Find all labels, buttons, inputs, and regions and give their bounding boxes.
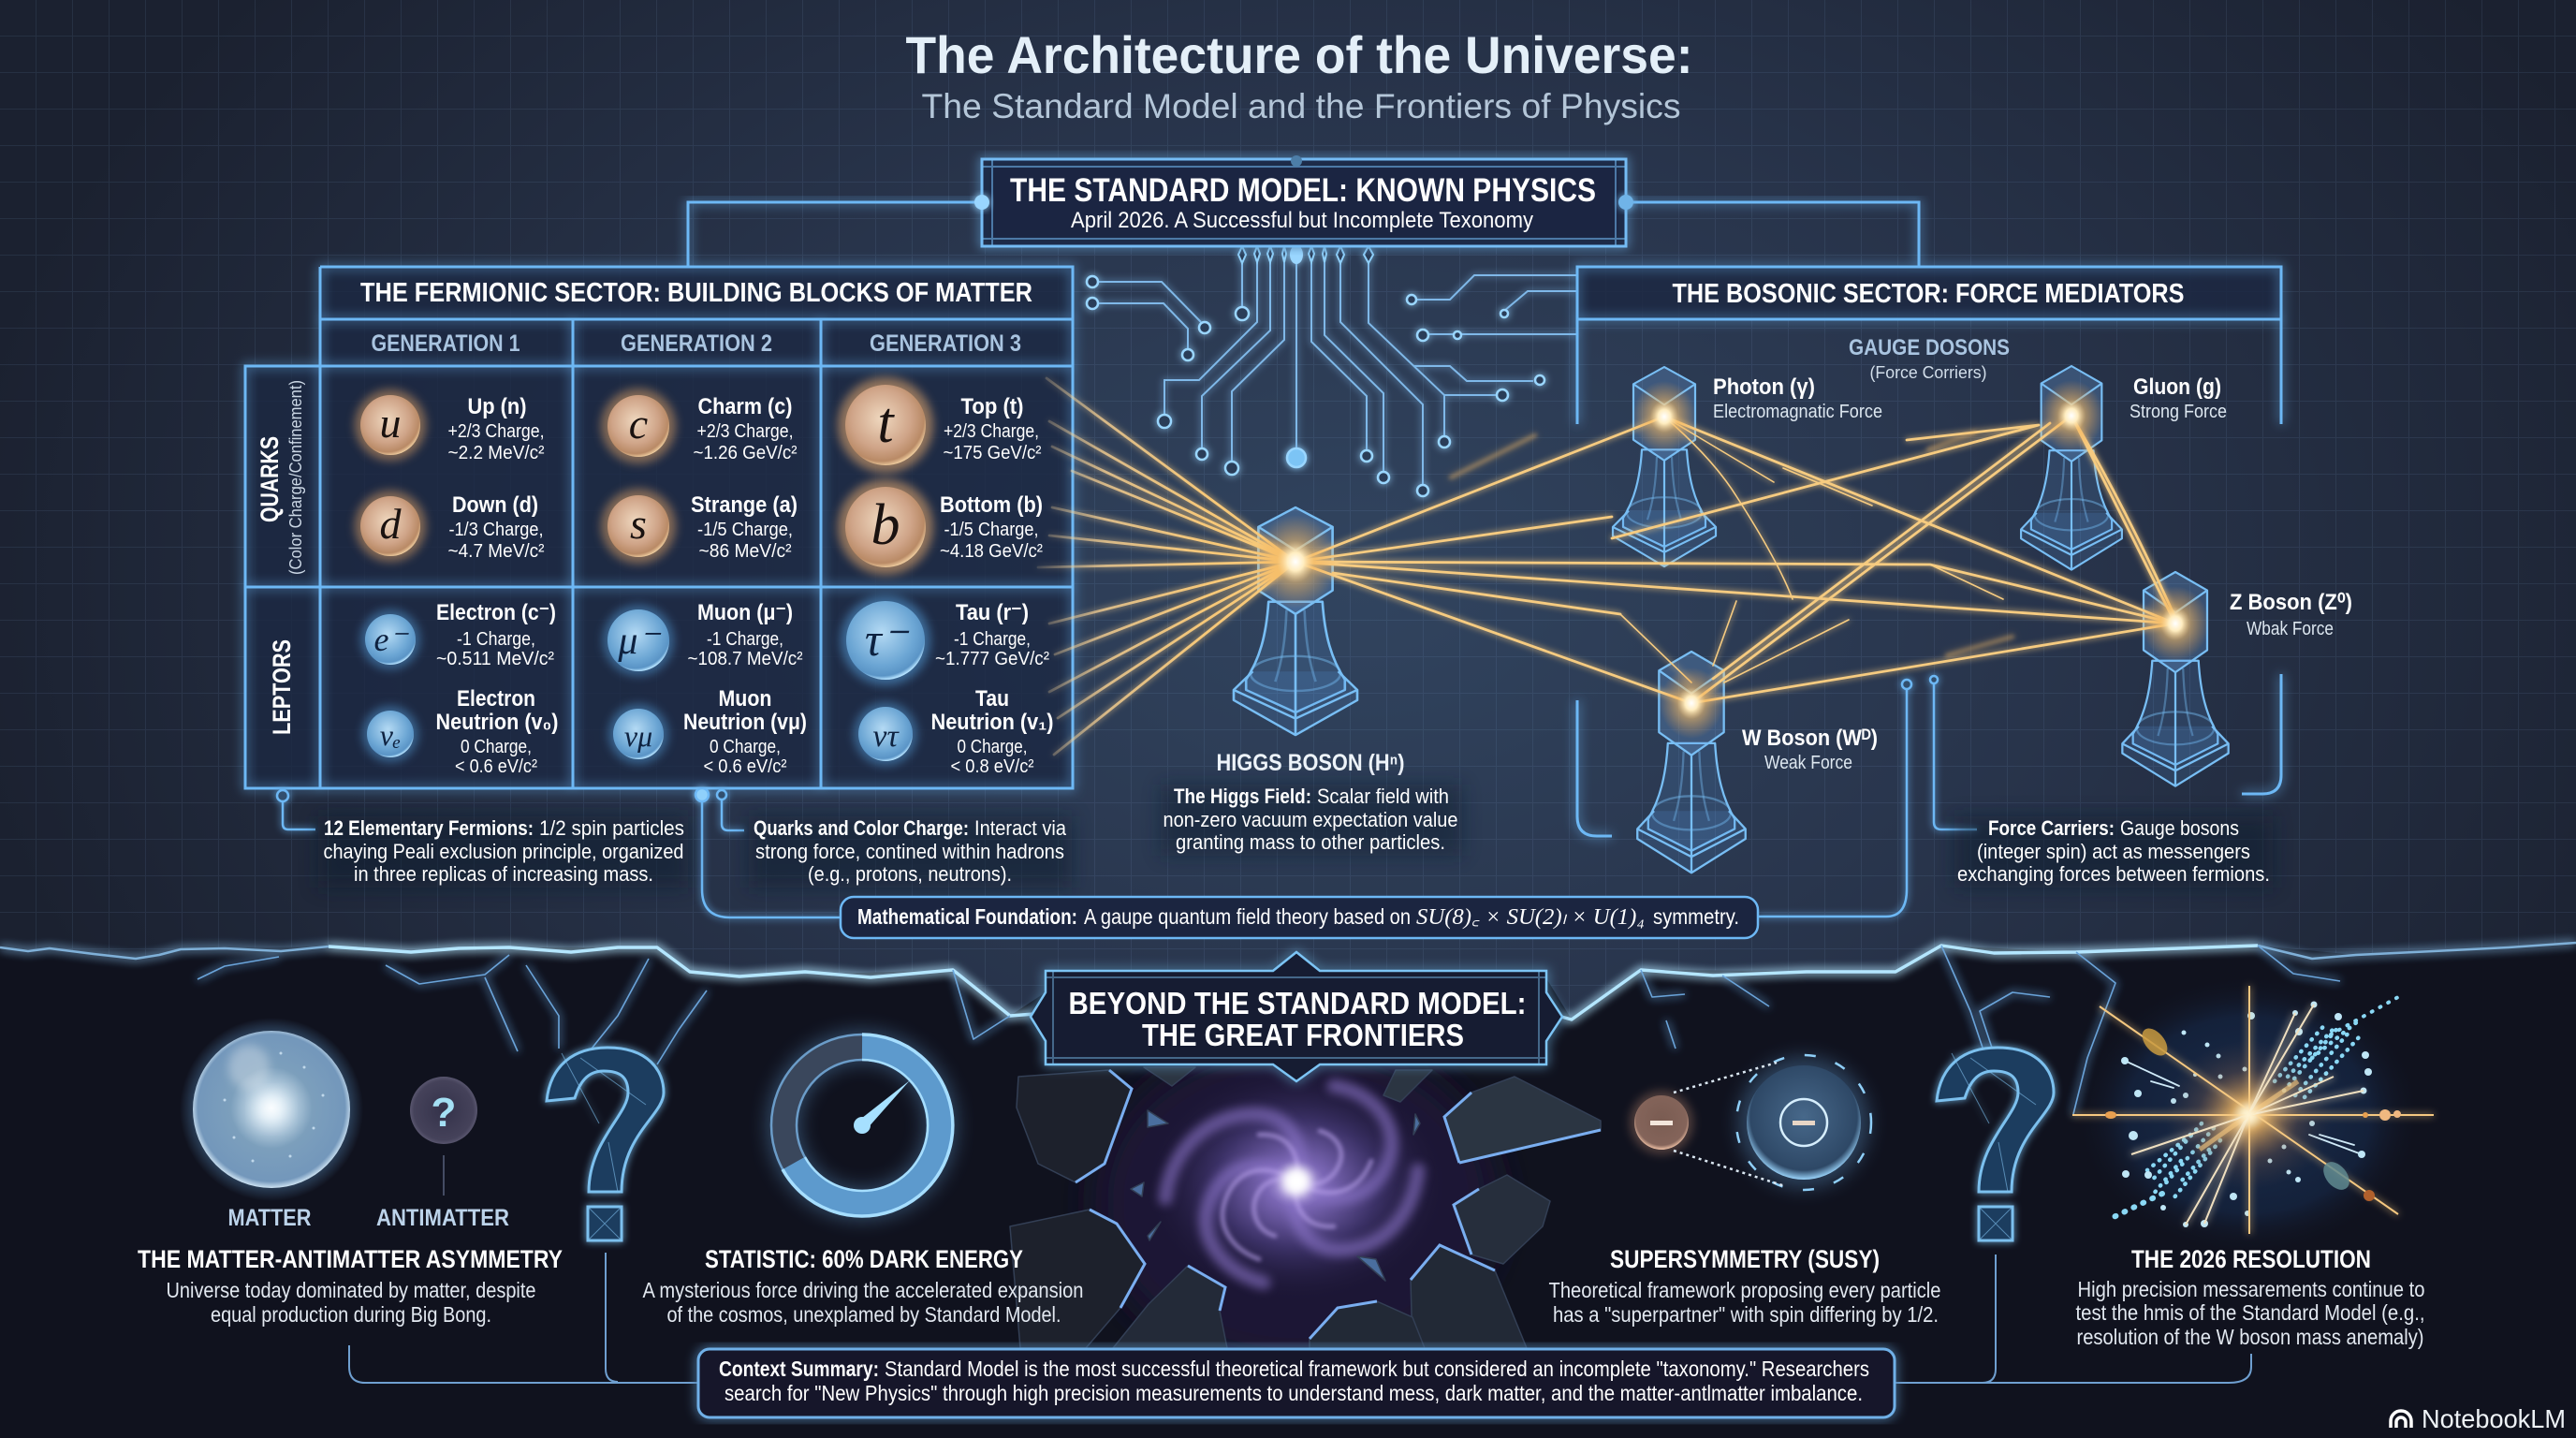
particle: top quark: ~175 GeV/c²: [944, 443, 1042, 463]
particle: up quark: [355, 389, 545, 463]
particle: strange quark: ~86 MeV/c²: [698, 541, 792, 562]
summary connectors: [349, 1253, 2251, 1383]
particle: muon neutrino: Neutrion (vμ): [683, 710, 807, 735]
callout connectors: [277, 676, 1977, 917]
particle: tau: τ⁻: [865, 613, 910, 666]
particle: bottom quark: -1/5 Charge,: [944, 520, 1039, 540]
particle: tau: [841, 595, 1049, 685]
particle: top quark: +2/3 Charge,: [944, 421, 1039, 442]
callout: 12 elementary fermions: 1/2 spin particles: [539, 816, 684, 840]
particle: strange quark: Strange (a): [691, 492, 798, 518]
particle: tau neutrino: ντ: [872, 719, 900, 754]
higgs field beams: [1038, 378, 2175, 755]
particle: muon neutrino: [608, 686, 807, 777]
callout: 12 elementary fermions: [318, 816, 688, 888]
generation labels: [371, 330, 1021, 357]
text: supersymmetry: SUPERSYMMETRY (SUSY): [1610, 1245, 1880, 1273]
callout: quarks and color charge: Quarks and Color Charge:: [754, 816, 969, 840]
particle: up quark: Up (n): [468, 394, 526, 419]
label: quarks: QUARKS: [256, 436, 284, 522]
particle: bottom quark: [838, 479, 1043, 575]
text: matter antimatter asymmetry: THE MATTER-ANTIMATTER ASYMMETRY: [138, 1245, 563, 1273]
text: dark energy statistic: [642, 1245, 1084, 1327]
icon: left question mark: [547, 1048, 664, 1240]
heading: standard model: THE STANDARD MODEL: KNOWN PHYSICS: [1010, 172, 1596, 209]
particle: tau: ~1.777 GeV/c²: [935, 649, 1049, 669]
particle: electron: Electron (c⁻): [436, 600, 556, 625]
particle: up quark: ~2.2 MeV/c²: [447, 443, 545, 463]
circuit traces: [1087, 245, 1577, 496]
heading: beyond: [1069, 986, 1526, 1052]
particle: muon: [603, 600, 803, 676]
callout: quarks and color charge: strong force, contined within hadrons: [755, 840, 1064, 863]
title: [906, 25, 1692, 125]
callout: force carriers: [1954, 816, 2273, 888]
scattered dots: [2121, 1002, 2372, 1227]
icon: collision burst: [2072, 975, 2434, 1255]
label: higgs boson: [1161, 750, 1462, 856]
particle: muon neutrino: 0 Charge,: [710, 737, 781, 757]
particle: strange quark: [601, 489, 798, 564]
icon: dark energy gauge: [771, 1034, 953, 1216]
panel: beyond the standard model banner: [1031, 952, 1562, 1081]
particle: charm quark: +2/3 Charge,: [696, 421, 794, 442]
callout: 12 elementary fermions: in three replicas of increasing mass.: [354, 862, 653, 886]
particle: up quark: u: [380, 399, 401, 447]
label: quarks: [256, 380, 305, 575]
text: higgs field: [1161, 785, 1462, 856]
label: z boson: Z Boson (Z⁰): [2230, 590, 2352, 615]
label: gluon: Gluon (g): [2133, 374, 2221, 400]
text: matter antimatter asymmetry: equal production during Big Bong.: [211, 1302, 491, 1327]
generation labels: GENERATION 1: [371, 330, 520, 357]
text: 2026 resolution: THE 2026 RESOLUTION: [2131, 1245, 2371, 1273]
label: matter and antimatter: MATTER: [228, 1205, 311, 1231]
particle: down quark: [355, 491, 545, 562]
icon: boson pillars: [1234, 366, 2229, 873]
particle: bottom quark: ~4.18 GeV/c²: [940, 541, 1043, 562]
callout: quarks and color charge: Interact via: [974, 816, 1067, 840]
text: higgs field: Scalar field with: [1317, 785, 1449, 808]
particle: tau neutrino: [854, 686, 1054, 777]
icon: right question mark: [1937, 1048, 2054, 1240]
particle: electron: [360, 600, 556, 669]
callout: context summary: Context Summary:: [719, 1357, 879, 1381]
particle: down quark: d: [380, 500, 402, 548]
particle: tau neutrino: < 0.8 eV/c²: [951, 756, 1034, 777]
gauge bosons label: [1849, 335, 2010, 382]
particle: tau: Tau (r⁻): [956, 600, 1029, 625]
text: dark energy statistic: of the cosmos, unexplamed by Standard Model.: [666, 1302, 1061, 1327]
particle: charm quark: ~1.26 GeV/c²: [693, 443, 798, 463]
callout: quarks and color charge: [749, 816, 1072, 888]
callout: mathematical foundation: symmetry.: [1653, 904, 1739, 929]
particle: tau: -1 Charge,: [954, 629, 1031, 650]
callout: force carriers: exchanging forces between fermions.: [1957, 862, 2270, 886]
callout: force carriers: Gauge bosons: [2120, 816, 2239, 840]
label: gluon: [2130, 374, 2227, 422]
panel: the standard model known physics: [974, 155, 1633, 246]
particle: electron neutrino: Electron: [457, 686, 535, 712]
particle: electron: e⁻: [374, 621, 409, 658]
label: photon: Electromagnatic Force: [1713, 402, 1882, 422]
text: 2026 resolution: [2076, 1245, 2424, 1349]
text: supersymmetry: [1548, 1245, 1941, 1327]
text: matter antimatter asymmetry: Universe today dominated by matter, despite: [167, 1278, 535, 1302]
callout: quarks and color charge: (e.g., protons, neutrons).: [808, 862, 1012, 886]
particle: tau neutrino: Neutrion (v₁): [930, 710, 1054, 735]
panel: fermionic sector table: [245, 267, 1073, 788]
particle: strange quark: s: [630, 500, 647, 548]
particle: top quark: [838, 377, 1042, 473]
particle: charm quark: c: [629, 400, 648, 448]
text: 2026 resolution: High precision messarements continue to: [2078, 1277, 2424, 1301]
text: higgs field: non-zero vacuum expectation value: [1163, 808, 1458, 831]
icon: supersymmetry particles: [1630, 1055, 1871, 1190]
label: photon: Photon (γ): [1713, 374, 1815, 400]
label: z boson: [2230, 590, 2352, 639]
particle: muon neutrino: < 0.6 eV/c²: [704, 756, 787, 777]
title: The Architecture of the Universe:: [906, 25, 1692, 84]
icon: antimatter: ?: [432, 1090, 456, 1136]
callout: 12 elementary fermions: 12 Elementary Fermions:: [324, 816, 534, 840]
subtitle: The Standard Model and the Frontiers of Physics: [921, 87, 1681, 125]
particle: muon: μ⁻: [617, 620, 661, 663]
callout: force carriers: (integer spin) act as messengers: [1977, 840, 2250, 863]
subheading: April 2026. A Successful but Incomplete Texonomy: [1071, 208, 1533, 233]
text: supersymmetry: has a "superpartner" with spin differing by 1/2.: [1553, 1302, 1939, 1327]
label: leptons: LEPTORS: [268, 639, 296, 735]
label: quarks: (Color Charge/Confinement): [286, 380, 305, 575]
text: 2026 resolution: resolution of the W boson mass anemaly): [2076, 1325, 2424, 1349]
logo: notebooklm: NotebookLM: [2422, 1404, 2566, 1433]
callout: mathematical foundation: [841, 897, 1758, 938]
label: photon: [1713, 374, 1882, 422]
particle: muon neutrino: Muon: [719, 686, 771, 712]
label: z boson: Wbak Force: [2247, 619, 2334, 639]
particle: electron neutrino: 0 Charge,: [461, 737, 532, 757]
label: w boson: W Boson (Wᴰ): [1742, 726, 1878, 751]
gauge bosons label: (Force Corriers): [1870, 363, 1986, 382]
heading: beyond: BEYOND THE STANDARD MODEL:: [1069, 986, 1526, 1020]
particle: electron neutrino: [362, 686, 558, 777]
text: higgs field: granting mass to other particles.: [1176, 830, 1445, 854]
particle: electron neutrino: Neutrion (v₀): [436, 710, 558, 735]
particle: charm quark: Charm (c): [698, 394, 792, 419]
particle: down quark: Down (d): [452, 492, 538, 518]
text: dark energy statistic: STATISTIC: 60% DARK ENERGY: [705, 1245, 1023, 1273]
particle: muon: Muon (μ⁻): [697, 600, 793, 625]
particle: electron neutrino: νₑ: [380, 718, 401, 752]
label: w boson: Weak Force: [1764, 753, 1852, 773]
particle: bottom quark: b: [871, 493, 900, 557]
callout: force carriers: Force Carriers:: [1988, 816, 2115, 840]
particle: tau neutrino: Tau: [975, 686, 1009, 712]
label: higgs boson: HIGGS BOSON (Hⁿ): [1217, 750, 1404, 776]
text: dark energy statistic: A mysterious force driving the accelerated expansion: [642, 1278, 1084, 1302]
generation labels: GENERATION 2: [621, 330, 772, 357]
text: higgs field: The Higgs Field:: [1174, 785, 1311, 808]
heading: fermionic sector: THE FERMIONIC SECTOR: BUILDING BLOCKS OF MATTER: [360, 278, 1032, 308]
rocks: [1010, 1067, 1601, 1348]
heading: beyond: THE GREAT FRONTIERS: [1142, 1018, 1464, 1052]
icon: glowing cores: [1254, 380, 2209, 739]
particle: muon neutrino: νμ: [624, 719, 652, 753]
particle: muon: -1 Charge,: [707, 629, 783, 650]
lightning crack: [0, 943, 2576, 1114]
particle: electron: -1 Charge,: [457, 629, 535, 650]
callout: context summary: search for "New Physics" through high precision measurements to understand mess, dark matter, and the matter-antlmatter imbalance.: [724, 1381, 1863, 1405]
callout: 12 elementary fermions: chaying Peali exclusion principle, organized: [324, 840, 683, 863]
label: w boson: [1742, 726, 1878, 773]
panel: bosonic sector: [1577, 267, 2281, 836]
particle: muon: ~108.7 MeV/c²: [687, 649, 803, 669]
callout: context summary: [698, 1349, 1895, 1417]
particle: down quark: -1/3 Charge,: [449, 520, 543, 540]
icon: matter sphere: [131, 1018, 412, 1201]
particle: charm quark: [601, 389, 798, 463]
label: matter and antimatter: ANTIMATTER: [376, 1205, 509, 1231]
particle: down quark: ~4.7 MeV/c²: [447, 541, 545, 562]
heading: bosonic sector: THE BOSONIC SECTOR: FORCE MEDIATORS: [1672, 279, 2185, 309]
particle: top quark: Top (t): [960, 394, 1024, 419]
particle: electron neutrino: < 0.6 eV/c²: [455, 756, 537, 777]
particle: electron: ~0.511 MeV/c²: [436, 649, 554, 669]
callout: context summary: Standard Model is the most successful theoretical framework but considered an incomplete "taxonomy." Researchers: [885, 1357, 1869, 1381]
particle: top quark: t: [877, 391, 895, 455]
dark lower section with lightning fracture: [0, 943, 2576, 1438]
particle: up quark: +2/3 Charge,: [447, 421, 545, 442]
particle: tau neutrino: 0 Charge,: [957, 737, 1028, 757]
callout: mathematical foundation: A gaupe quantum field theory based on: [1084, 904, 1411, 929]
text: supersymmetry: Theoretical framework proposing every particle: [1548, 1278, 1941, 1302]
label: matter and antimatter: [228, 1205, 509, 1231]
icon: galaxy with rubble: [1010, 1039, 1601, 1367]
icon: antimatter: [410, 1077, 477, 1196]
particle: bottom quark: Bottom (b): [940, 492, 1043, 518]
particle: strange quark: -1/5 Charge,: [697, 520, 793, 540]
text: matter antimatter asymmetry: [138, 1245, 563, 1327]
connector lines from top box: [688, 202, 1919, 267]
generation labels: GENERATION 3: [870, 330, 1021, 357]
label: gluon: Strong Force: [2130, 402, 2227, 422]
text: 2026 resolution: test the hmis of the Standard Model (e.g.,: [2076, 1300, 2424, 1325]
callout: mathematical foundation: SU(8)꜀ × SU(2)ₗ × U(1)₄: [1416, 905, 1645, 930]
gauge bosons label: GAUGE DOSONS: [1849, 335, 2010, 360]
callout: mathematical foundation: Mathematical Foundation:: [857, 904, 1077, 929]
